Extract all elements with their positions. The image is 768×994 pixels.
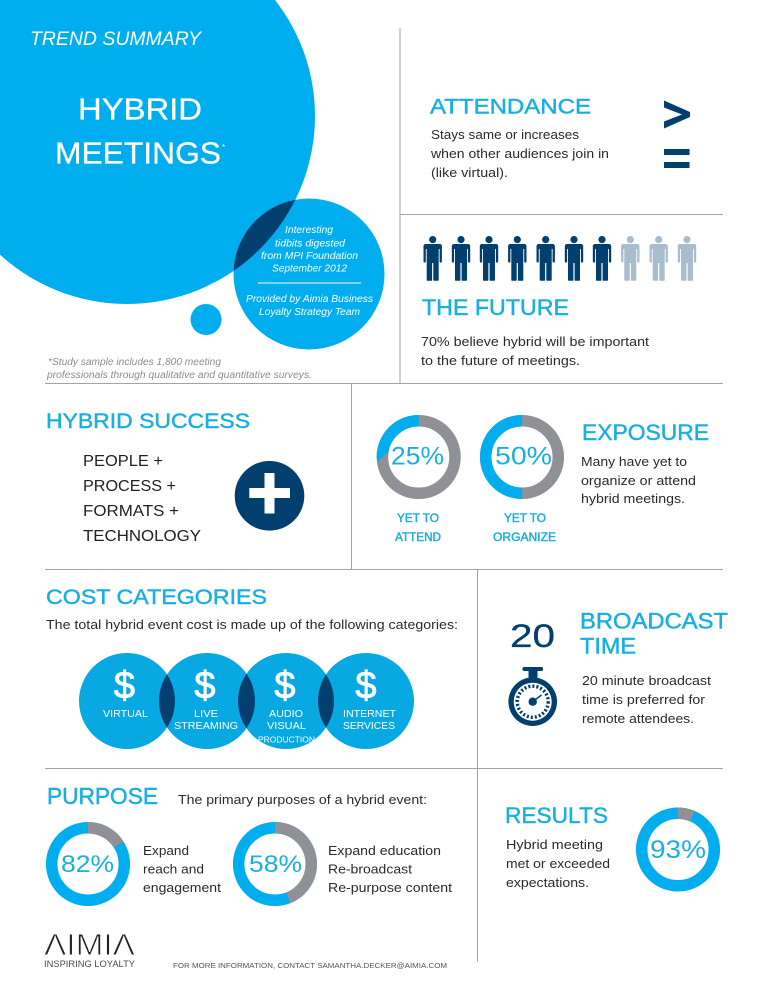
- text: expand reach: reach and: [143, 862, 204, 876]
- title: [55, 92, 225, 170]
- category labels: AUDIO: [269, 708, 303, 720]
- footnote: *Study sample includes 1,800 meeting: [48, 357, 221, 368]
- donut chart: 50 percent yet to organize: YET TO: [504, 513, 546, 525]
- donut chart: 58 percent: [239, 828, 311, 900]
- heading: THE FUTURE: [422, 295, 569, 320]
- donut chart: 93 percent: [642, 813, 714, 886]
- donut chart: 82 percent: 82%: [61, 851, 114, 878]
- body text: when other audiences join in: [430, 146, 609, 161]
- heading: TIME: [580, 634, 636, 658]
- panel: attendance: [430, 94, 690, 180]
- text: expand education: Expand education: [328, 843, 441, 858]
- footnote: [46, 357, 312, 381]
- logo: Aimia: INSPIRING LOYALTY: [44, 959, 136, 970]
- body text: [581, 454, 696, 506]
- small decorative bubble: [190, 304, 222, 335]
- title: *: [222, 143, 225, 152]
- dollar signs: $: [274, 665, 296, 707]
- panel: the future: [421, 236, 696, 368]
- title: HYBRID: [78, 92, 202, 126]
- title: MEETINGS: [55, 136, 221, 170]
- list: TECHNOLOGY: [83, 528, 201, 545]
- category labels: [103, 708, 397, 744]
- donut chart: 58 percent: 58%: [249, 851, 302, 878]
- body text: expectations.: [506, 875, 589, 890]
- category labels: INTERNET: [343, 708, 397, 720]
- donut chart: 50 percent yet to organize: 50%: [495, 442, 552, 470]
- list: PEOPLE +: [83, 453, 163, 470]
- panel: broadcast time: [508, 608, 728, 726]
- category labels: LIVE: [194, 708, 218, 720]
- dollar signs: $: [355, 665, 377, 707]
- logo: Aimia: ΛIMIΛ: [44, 927, 135, 962]
- list: [83, 453, 201, 545]
- overlap lens: [234, 200, 296, 271]
- dollar signs: [114, 665, 377, 707]
- list: FORMATS +: [83, 503, 179, 520]
- donut chart: 25 percent yet to attend: 25%: [391, 442, 444, 470]
- dollar signs: $: [114, 665, 135, 707]
- big number: 20: [510, 618, 555, 654]
- category labels: PRODUCTION: [258, 736, 315, 744]
- panel: purpose: [47, 783, 452, 900]
- tidbits text: tidbits digested: [275, 238, 346, 250]
- tidbits text: Interesting: [285, 224, 333, 236]
- category labels: STREAMING: [174, 720, 238, 732]
- category labels: VIRTUAL: [103, 708, 148, 720]
- heading: RESULTS: [505, 803, 608, 828]
- panel: title bubble: [0, 0, 315, 304]
- donut chart: 50 percent yet to organize: [486, 421, 558, 544]
- venn row of cost circles: [79, 653, 414, 749]
- text: expand education: Re-broadcast: [328, 862, 412, 876]
- heading: HYBRID SUCCESS: [46, 409, 250, 433]
- panel: hybrid success: [46, 409, 304, 545]
- text: expand reach: engagement: [143, 880, 221, 895]
- donut chart: 50 percent yet to organize: ORGANIZE: [493, 532, 556, 544]
- tidbits text: from MPI Foundation: [261, 250, 358, 262]
- text: expand education: Re-purpose content: [328, 880, 452, 895]
- icon: stopwatch: [508, 667, 557, 726]
- icon: greater than or equal: [664, 100, 690, 168]
- footnote: professionals through qualitative and quantitative surveys.: [46, 370, 312, 381]
- body text: (like virtual).: [431, 165, 508, 180]
- donut chart: 25 percent yet to attend: ATTEND: [395, 532, 441, 544]
- panel: exposure: [581, 420, 709, 506]
- icon row: people 70 percent: [424, 236, 696, 281]
- text: expand education: [328, 843, 452, 895]
- body text: [430, 127, 609, 180]
- body text: [506, 837, 610, 890]
- body text: met or exceeded: [506, 856, 610, 871]
- heading: ATTENDANCE: [430, 94, 591, 118]
- body text: Hybrid meeting: [506, 837, 603, 852]
- footer contact: FOR MORE INFORMATION, CONTACT SAMANTHA.DECKER@AIMIA.COM: [173, 961, 447, 970]
- heading: [580, 608, 728, 658]
- body text: Many have yet to: [581, 454, 687, 469]
- panel: results: [505, 803, 714, 890]
- donut chart: 25 percent yet to attend: YET TO: [397, 513, 439, 525]
- category labels: VISUAL: [267, 720, 306, 732]
- intro text: The primary purposes of a hybrid event:: [178, 792, 427, 807]
- donut chart: 82 percent: [52, 828, 124, 900]
- body text: hybrid meetings.: [581, 491, 685, 506]
- big cyan circle: [0, 0, 315, 304]
- body text: time is preferred for: [582, 692, 706, 707]
- body text: 70% believe hybrid will be important: [421, 334, 649, 349]
- body text: organize or attend: [581, 473, 696, 488]
- heading: BROADCAST: [580, 608, 728, 634]
- heading: EXPOSURE: [582, 420, 709, 445]
- panel: tidbits bubble: [234, 198, 384, 350]
- body text: remote attendees.: [582, 711, 694, 726]
- dollar signs: $: [194, 665, 216, 707]
- body text: to the future of meetings.: [421, 353, 580, 368]
- panel: cost categories: [46, 585, 458, 749]
- tidbits text: September 2012: [272, 262, 347, 274]
- intro text: The total hybrid event cost is made up of the following categories:: [46, 617, 458, 632]
- icon: plus: [235, 461, 304, 531]
- donut chart: 25 percent yet to attend: [382, 421, 455, 544]
- heading: COST CATEGORIES: [46, 585, 267, 609]
- body text: Stays same or increases: [431, 127, 580, 142]
- body text: [421, 334, 649, 368]
- body text: [582, 673, 711, 726]
- category labels: SERVICES: [343, 720, 395, 732]
- donut chart: 93 percent: 93%: [650, 836, 706, 864]
- list: PROCESS +: [83, 478, 176, 495]
- tidbits text: Provided by Aimia Business: [246, 293, 374, 305]
- body text: 20 minute broadcast: [582, 673, 711, 688]
- tidbits text: Loyalty Strategy Team: [259, 306, 360, 318]
- text: expand reach: Expand: [143, 843, 189, 858]
- text: expand reach: [143, 843, 221, 895]
- heading: PURPOSE: [47, 783, 158, 809]
- tidbits text: [246, 224, 374, 318]
- label: trend summary: TREND SUMMARY: [30, 29, 202, 50]
